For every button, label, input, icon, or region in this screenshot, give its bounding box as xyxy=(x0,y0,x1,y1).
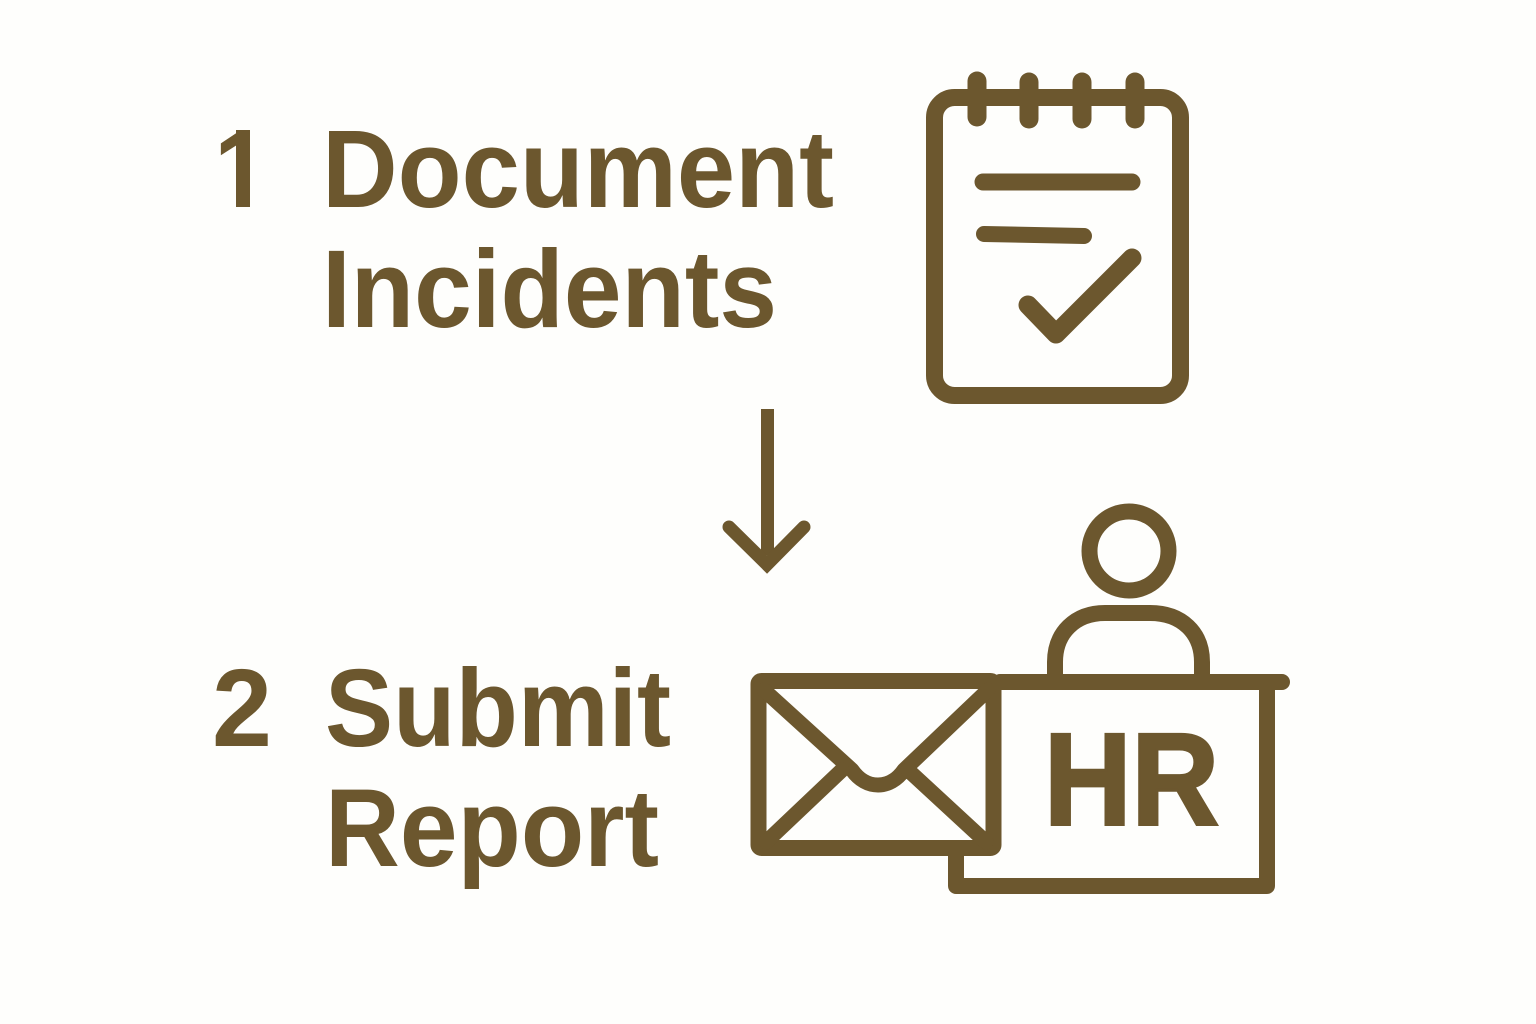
step 1 heading xyxy=(322,108,834,351)
icon: notepad with checklist xyxy=(934,81,1180,396)
step 2 number: 2 xyxy=(212,647,272,770)
icon: HR representative at desk xyxy=(956,512,1282,886)
infographic canvas xyxy=(216,72,1290,894)
step 2 heading: Report xyxy=(325,767,659,890)
step 1 heading: Document xyxy=(322,108,834,231)
step 1 number: 1 xyxy=(214,108,274,231)
step 2 heading xyxy=(325,647,671,890)
step 2 heading: Submit xyxy=(325,647,671,770)
icon: envelope xyxy=(758,681,994,848)
desk xyxy=(956,682,1282,886)
step 1 number xyxy=(220,130,250,207)
desk label: HR xyxy=(1044,706,1219,852)
step 1 heading: Incidents xyxy=(322,228,777,351)
person head xyxy=(1090,512,1168,590)
person shoulders xyxy=(1055,613,1202,680)
arrow: step 1 to step 2 xyxy=(729,409,804,564)
